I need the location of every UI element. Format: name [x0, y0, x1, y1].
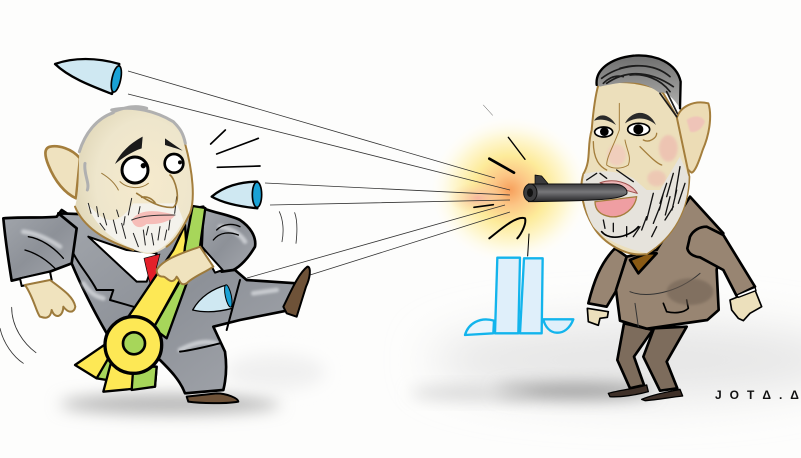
impact lines — [211, 130, 260, 167]
motion marks by the figure — [0, 212, 297, 363]
ear — [676, 102, 710, 173]
eyebrows — [594, 115, 616, 125]
suit: left arm and body — [3, 207, 297, 393]
floor shading — [60, 322, 801, 414]
eyebrows — [115, 137, 143, 164]
hands — [587, 290, 762, 325]
mouth — [132, 211, 175, 227]
muzzle flash glow — [428, 114, 592, 266]
figure: president in grey suit — [0, 59, 310, 403]
speed lines — [128, 71, 510, 278]
suit highlights — [23, 227, 277, 350]
eyes — [595, 127, 613, 137]
beard — [87, 203, 183, 253]
brown jacket — [588, 197, 756, 329]
towers: National Congress — [465, 258, 573, 335]
hair — [597, 55, 681, 108]
legs — [617, 323, 687, 391]
nose — [607, 103, 629, 168]
ear — [45, 146, 80, 198]
nose — [137, 175, 177, 207]
hands and cuffs — [20, 247, 223, 318]
bullet in the leg — [193, 284, 234, 312]
shoes — [187, 267, 310, 403]
beard — [583, 157, 689, 253]
gun — [524, 175, 627, 202]
suit creases — [25, 224, 240, 268]
cheeks — [659, 135, 678, 162]
burst marks — [474, 105, 529, 256]
head — [581, 55, 689, 254]
figure: man in brown suit with gun in mouth — [465, 55, 762, 401]
jacket lapel line — [73, 253, 240, 352]
mouth — [595, 197, 637, 217]
head — [75, 107, 193, 254]
shirt and tie — [88, 237, 160, 283]
shoes — [608, 385, 683, 401]
bullet middle — [212, 182, 262, 208]
jacket shadow — [667, 278, 713, 305]
bullet top — [55, 59, 123, 94]
presidential sash — [75, 206, 205, 392]
eyes — [122, 157, 148, 183]
